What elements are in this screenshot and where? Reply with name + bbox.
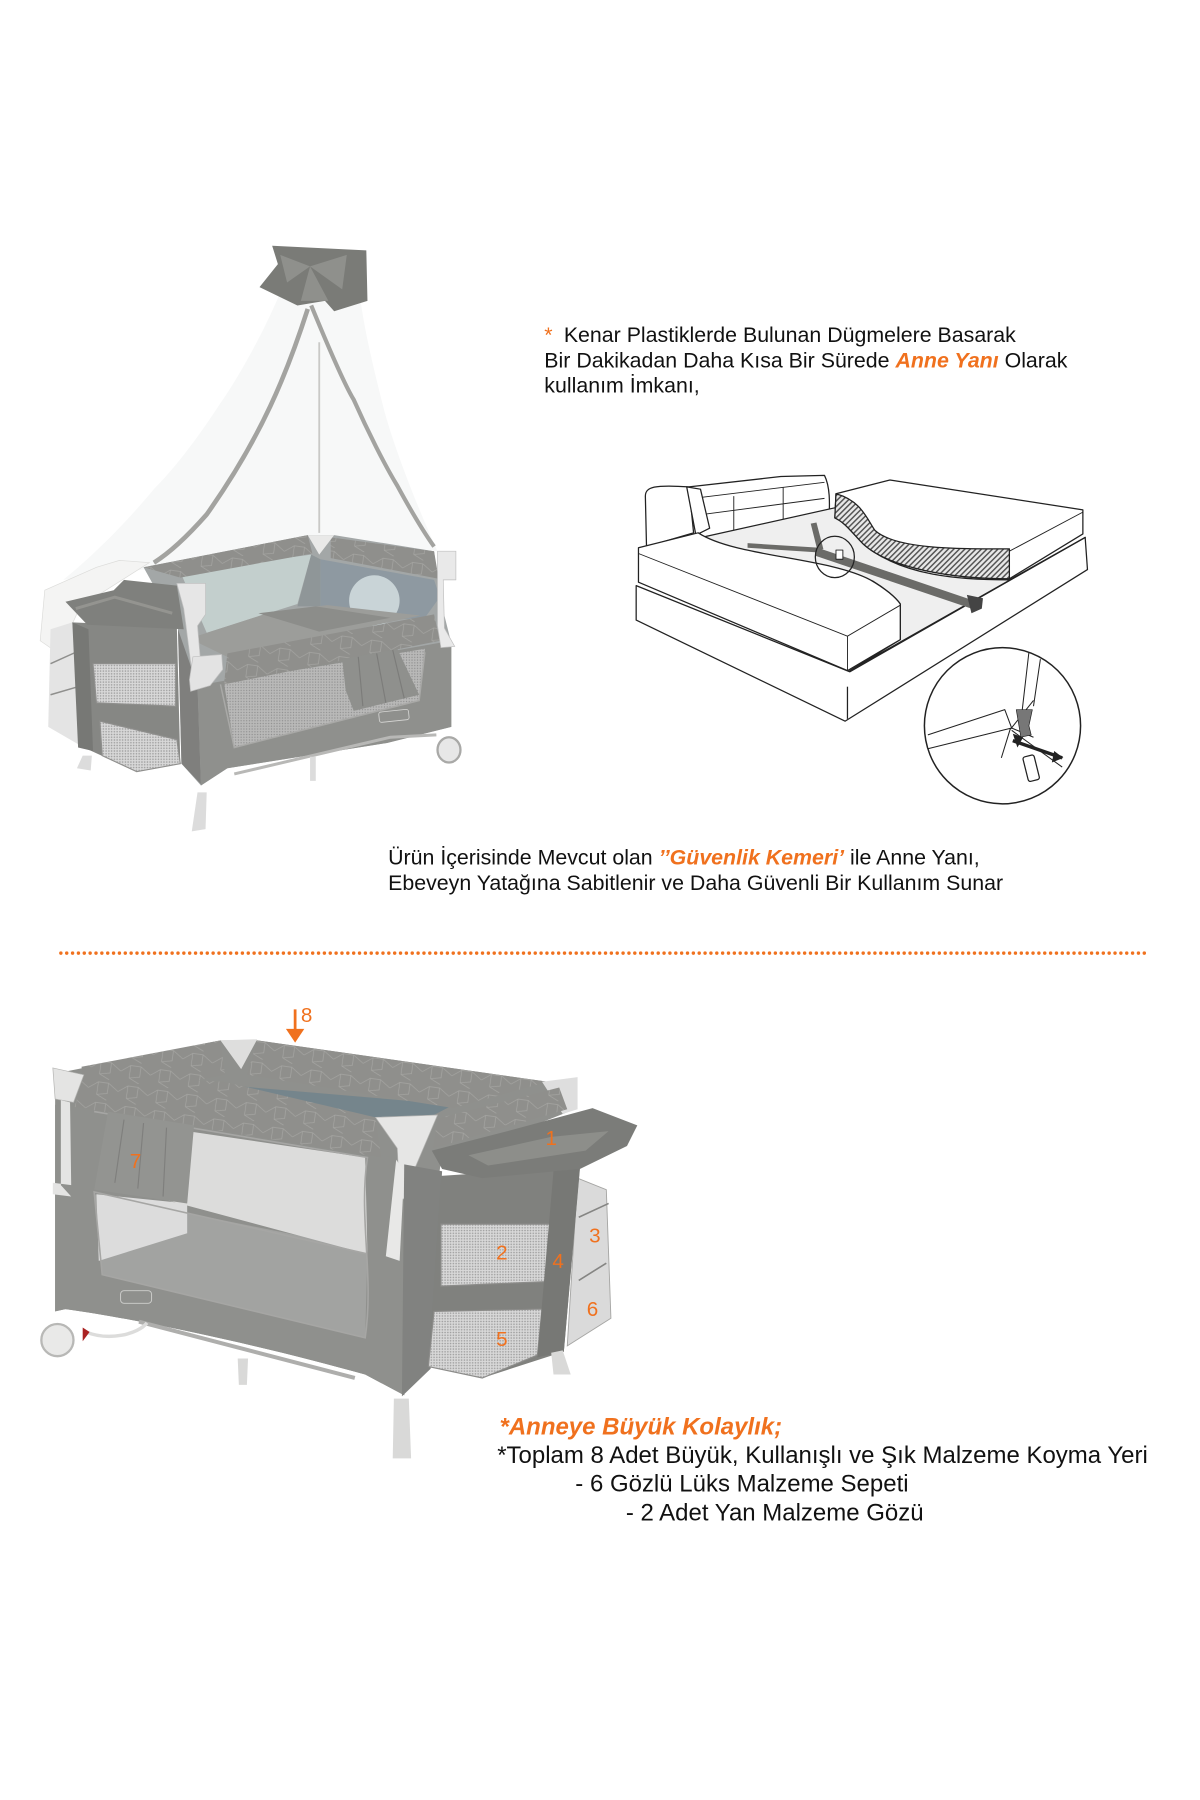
pocket number 7 fabric bbox=[94, 1112, 194, 1203]
product photo: crib with storage bbox=[41, 1004, 637, 1458]
product photo: crib with canopy bbox=[40, 246, 460, 831]
window lower mesh bbox=[94, 1194, 367, 1338]
legs bbox=[77, 756, 316, 831]
storage description text: *Toplam 8 Adet Büyük, Kullanışlı ve Şık Malzeme Koyma Yeri bbox=[497, 1442, 1148, 1469]
pocket numbers: 8 bbox=[301, 1004, 312, 1027]
belt description text bbox=[388, 846, 1003, 895]
organizer pocket bbox=[72, 622, 180, 772]
window frame bbox=[94, 1112, 368, 1338]
canopy pole bbox=[318, 342, 320, 533]
canopy net bbox=[63, 293, 438, 580]
left mattress bbox=[638, 533, 900, 671]
window frame bbox=[220, 652, 425, 748]
intro text: * bbox=[544, 323, 553, 347]
mattress bbox=[189, 605, 420, 657]
side rail bbox=[433, 1087, 567, 1148]
pocket: fabric bbox=[342, 649, 419, 711]
intro text: kullanım İmkanı, bbox=[544, 374, 700, 398]
pocket numbers: 6 bbox=[587, 1298, 598, 1321]
detail ring bbox=[815, 536, 854, 578]
organizer strap bbox=[72, 622, 93, 751]
back corner bbox=[308, 535, 334, 555]
pocket numbers: 1 bbox=[545, 1127, 557, 1150]
mesh pockets bbox=[93, 664, 176, 706]
pocket numbers: 5 bbox=[496, 1328, 508, 1351]
intro text: Kenar Plastiklerde Bulunan Dügmelere Basarak bbox=[564, 323, 1016, 347]
net tail bbox=[40, 560, 149, 653]
belt description text: ’’Güvenlik Kemeri’ ile Anne Yanı, bbox=[659, 846, 980, 870]
hinges bbox=[177, 551, 456, 691]
caster wheel bbox=[438, 737, 460, 762]
front window mesh bbox=[224, 649, 425, 748]
strap bbox=[537, 1169, 580, 1357]
storage description text bbox=[497, 1413, 1148, 1526]
canopy bow bbox=[260, 246, 367, 311]
storage description text: - 2 Adet Yan Malzeme Gözü bbox=[626, 1499, 924, 1526]
front rail bbox=[224, 614, 440, 684]
storage description text: - 6 Gözlü Lüks Malzeme Sepeti bbox=[575, 1471, 909, 1498]
pocket numbers: 2 bbox=[496, 1242, 508, 1265]
crib silhouette bbox=[144, 535, 451, 785]
crib side panel bbox=[178, 629, 201, 784]
frame bar bbox=[234, 735, 436, 774]
side panel bbox=[402, 1164, 442, 1396]
back corner bbox=[220, 1039, 257, 1069]
pocket numbers: 7 bbox=[130, 1150, 141, 1173]
intro text bbox=[544, 323, 1068, 398]
detail circle bbox=[924, 648, 1081, 804]
mattress cross-section bbox=[835, 494, 1009, 579]
organizer tray bbox=[432, 1108, 637, 1178]
right baskets bbox=[567, 1178, 611, 1346]
bed attachment diagram bbox=[636, 475, 1087, 804]
pocket numbers: 3 bbox=[589, 1224, 601, 1247]
side baskets bbox=[48, 622, 84, 748]
legs bbox=[238, 1350, 571, 1458]
interior bbox=[172, 1081, 454, 1120]
belt description text: Ürün İçerisinde Mevcut olan bbox=[388, 846, 659, 870]
pocket numbers: 4 bbox=[552, 1250, 564, 1273]
right mattress bbox=[835, 480, 1083, 579]
bed base bbox=[636, 537, 1087, 721]
base top surface bbox=[702, 508, 1085, 671]
front panel bbox=[198, 641, 451, 785]
canopy ribbons bbox=[154, 309, 308, 563]
brand tag bbox=[121, 1291, 152, 1303]
caster wheel bbox=[41, 1324, 73, 1356]
organizer pad bbox=[65, 580, 184, 629]
mesh pockets bbox=[441, 1224, 551, 1286]
back rails bbox=[82, 1040, 225, 1082]
crib silhouette bbox=[55, 1040, 578, 1395]
crib outline bbox=[645, 475, 829, 547]
frame bar bbox=[139, 1322, 355, 1378]
back rails bbox=[144, 535, 312, 578]
intro text: Bir Dakikadan Daha Kısa Bir Sürede bbox=[544, 348, 895, 372]
orange arrow bbox=[286, 1009, 304, 1043]
organizer body bbox=[428, 1167, 580, 1378]
inner mesh walls bbox=[180, 555, 311, 633]
pocket numbers bbox=[130, 1004, 601, 1351]
window upper mesh bbox=[167, 1131, 367, 1254]
safety belt bbox=[748, 522, 983, 613]
intro text: Anne Yanı Olarak bbox=[895, 348, 1067, 372]
storage description text: *Anneye Büyük Kolaylık; bbox=[500, 1413, 782, 1440]
front panel bbox=[55, 1105, 404, 1395]
white hinges bbox=[53, 1068, 438, 1261]
belt description text: Ebeveyn Yatağına Sabitlenir ve Daha Güvenli Bir Kullanım Sunar bbox=[388, 871, 1003, 895]
front rail bbox=[75, 1075, 381, 1158]
brand tag bbox=[379, 709, 409, 723]
